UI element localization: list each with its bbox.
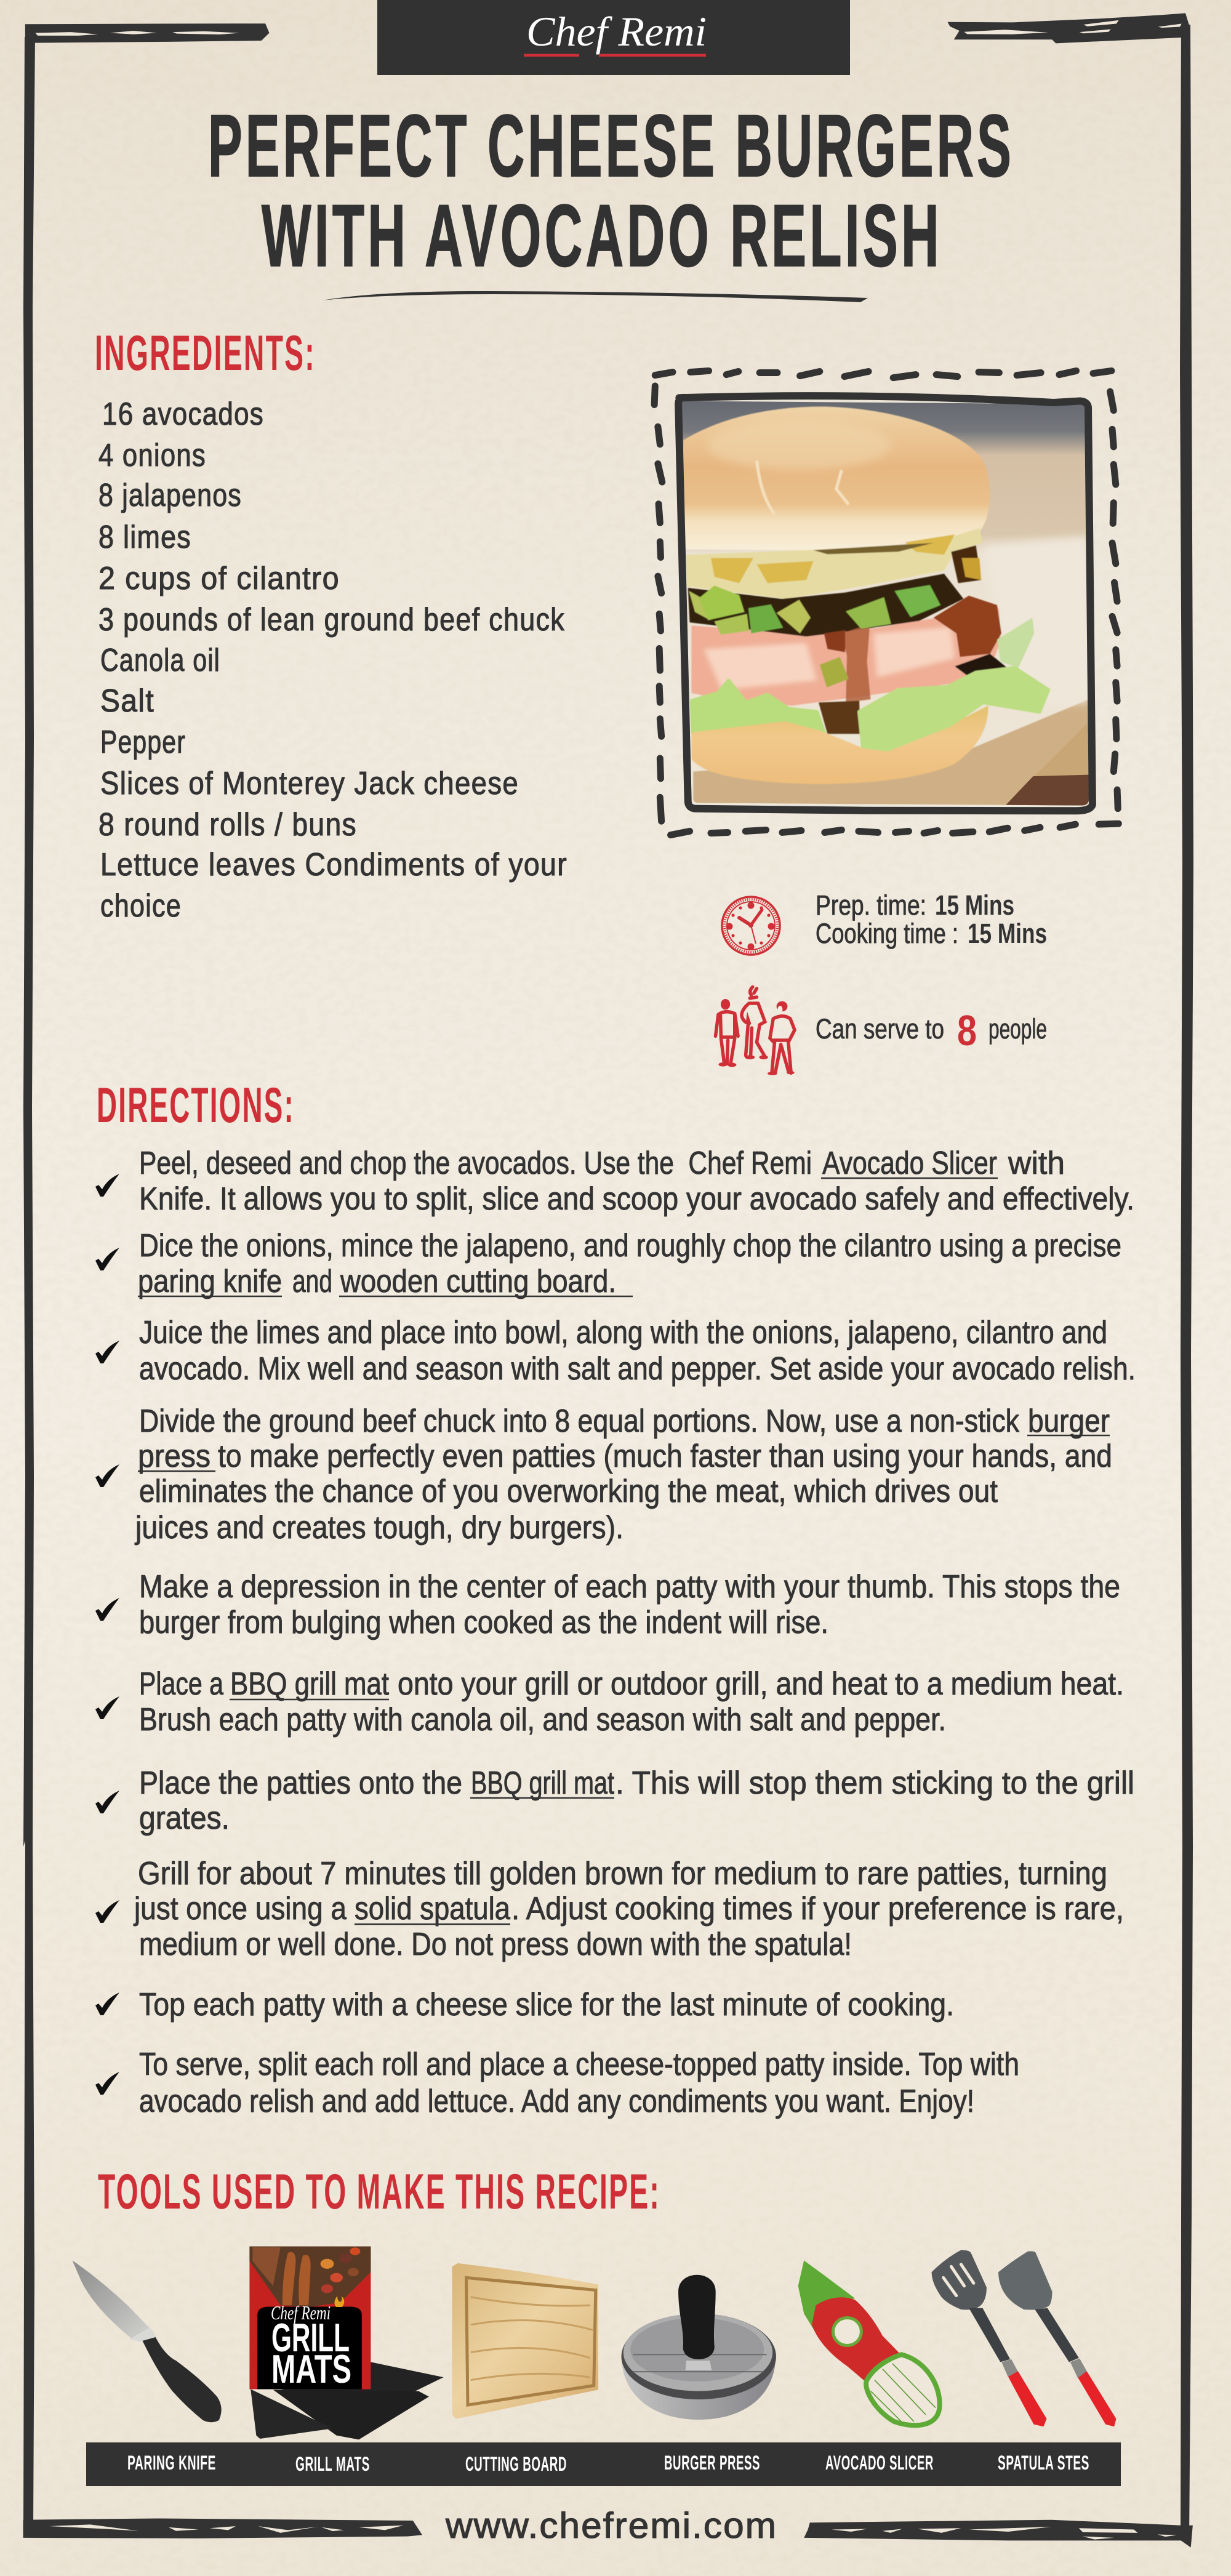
serves eight people: Can serve to (816, 1013, 944, 1045)
step 4: burger (1028, 1403, 1110, 1439)
step 2: wooden cutting board. (340, 1264, 616, 1299)
ingredients list: 8 jalapenos (98, 478, 242, 513)
tool: paring knife (73, 2260, 222, 2422)
tool labels bar: AVOCADO SLICER (825, 2452, 934, 2474)
tool labels bar: PARING KNIFE (127, 2452, 216, 2474)
prep and cooking time (816, 889, 1047, 949)
top bun (683, 407, 990, 550)
tool: burger press (622, 2275, 776, 2420)
tool: avocado slicer (798, 2260, 940, 2425)
ingredients list: Pepper (100, 724, 186, 760)
heading: directions: DIRECTIONS: (97, 1078, 295, 1133)
step 7: grates. (139, 1800, 230, 1836)
step 5: burger from bulging when cooked as the indent will rise. (139, 1605, 828, 1640)
prep and cooking time: 15 Mins (935, 889, 1014, 921)
dashed outer frame (654, 371, 1118, 835)
heading: ingredients: INGREDIENTS: (95, 326, 316, 381)
step 4 (95, 1403, 1112, 1546)
tool: cutting board (452, 2263, 598, 2419)
step 2: paring knife (138, 1264, 282, 1299)
directions list (95, 1146, 1136, 2119)
step 8: just once using a (133, 1891, 347, 1927)
step 1 (95, 1146, 1134, 1217)
photo frame (678, 396, 1093, 811)
ingredients list (98, 396, 567, 924)
ingredients list: choice (100, 888, 182, 924)
photo (679, 398, 1093, 809)
step 4: to make perfectly even patties (much faster than using your hands, and (218, 1438, 1112, 1474)
tool: spatula set (932, 2250, 1116, 2426)
step 5: Make a depression in the center of each patty with your thumb. This stops the (139, 1569, 1120, 1605)
icon: clock (722, 897, 780, 955)
ingredients list: Canola oil (100, 643, 220, 678)
ingredients list: Slices of Monterey Jack cheese (100, 766, 519, 801)
step 1: Avocado Slicer (822, 1146, 997, 1181)
ingredients list: 8 limes (98, 520, 191, 555)
step 4: juices and creates tough, dry burgers). (134, 1510, 624, 1546)
tool: grill mats (249, 2246, 444, 2439)
step 6: onto your grill or outdoor grill, and heat to a medium heat. (398, 1666, 1124, 1702)
step 7: . This will stop them sticking to the grill (616, 1765, 1134, 1801)
dark sauce (688, 574, 963, 636)
patty (691, 608, 1001, 705)
step 6: Place a (139, 1666, 223, 1702)
serves eight people (816, 1006, 1047, 1054)
burger photo with frames (654, 371, 1118, 835)
ingredients list: 4 onions (98, 438, 206, 473)
step 8: . Adjust cooking times if your preference is rare, (511, 1891, 1124, 1927)
step 6: BBQ grill mat (230, 1666, 389, 1702)
step 1: Knife. It allows you to split, slice and scoop your avocado safely and effectively. (139, 1181, 1134, 1217)
tool labels bar: SPATULA STES (998, 2452, 1089, 2474)
step 4: press (138, 1438, 211, 1474)
tool labels bar: CUTTING BOARD (465, 2453, 567, 2475)
heading: tools: TOOLS USED TO MAKE THIS RECIPE: (98, 2164, 660, 2220)
step 9: Top each patty with a cheese slice for the last minute of cooking. (139, 1987, 954, 2023)
step 4: eliminates the chance of you overworking the meat, which drives out (139, 1474, 998, 1509)
lettuce (691, 681, 824, 732)
step 8: Grill for about 7 minutes till golden brown for medium to rare patties, turning (138, 1856, 1107, 1892)
website footer: www.chefremi.com (445, 2506, 777, 2546)
prep and cooking time: 15 Mins (968, 918, 1047, 949)
tool labels bar: BURGER PRESS (664, 2452, 760, 2474)
ingredients list: 8 round rolls / buns (98, 807, 357, 843)
step 7: Place the patties onto the (139, 1765, 462, 1801)
prep and cooking time: Prep. time: (816, 889, 926, 921)
ingredients list: Lettuce leaves Condiments of your (100, 847, 567, 883)
tool: grill mats: GRILL (271, 2315, 350, 2360)
step 7: BBQ grill mat (471, 1765, 614, 1801)
ingredients list: 2 cups of cilantro (98, 561, 340, 596)
tool labels bar (86, 2442, 1121, 2486)
tool labels bar: GRILL MATS (295, 2453, 370, 2475)
step 1: Peel, deseed and chop the avocados. Use the Chef Remi (139, 1146, 812, 1181)
serves eight people: 8 (957, 1006, 977, 1054)
tool: grill mats: Chef Remi (271, 2301, 331, 2324)
ingredients list: 16 avocados (102, 396, 264, 432)
step 2 (95, 1228, 1121, 1299)
ingredients list: 3 pounds of lean ground beef chuck (98, 602, 565, 638)
step 6 (95, 1666, 1124, 1738)
title (208, 97, 1014, 285)
step 10 (95, 2047, 1019, 2119)
logo banner (377, 0, 850, 75)
step 4: Divide the ground beef chuck into 8 equal portions. Now, use a non-stick (139, 1403, 1020, 1439)
tool: grill mats: MATS (271, 2346, 351, 2391)
logo underline (524, 54, 706, 57)
step 10: To serve, split each roll and place a cheese-topped patty inside. Top with (139, 2047, 1019, 2082)
step 10: avocado relish and add lettuce. Add any condiments you want. Enjoy! (139, 2084, 974, 2119)
avocado cubes (689, 591, 710, 620)
step 2: and (292, 1264, 332, 1299)
step 8: medium or well done. Do not press down with the spatula! (139, 1927, 852, 1962)
pineapple (686, 528, 983, 599)
prep and cooking time: Cooking time : (816, 918, 958, 949)
step 5 (95, 1569, 1120, 1640)
step 8: solid spatula (355, 1891, 510, 1927)
bottom bun (691, 705, 988, 784)
logo text: Chef Remi (526, 8, 707, 55)
step 8 (95, 1856, 1124, 1962)
title swoosh (322, 291, 868, 302)
icon: three people (715, 987, 795, 1075)
serves eight people: people (988, 1013, 1047, 1045)
step 6: Brush each patty with canola oil, and season with salt and pepper. (139, 1702, 946, 1738)
step 7 (95, 1765, 1134, 1836)
ingredients list: Salt (100, 683, 154, 719)
step 3 (95, 1315, 1136, 1387)
step 1: with (1008, 1146, 1065, 1181)
